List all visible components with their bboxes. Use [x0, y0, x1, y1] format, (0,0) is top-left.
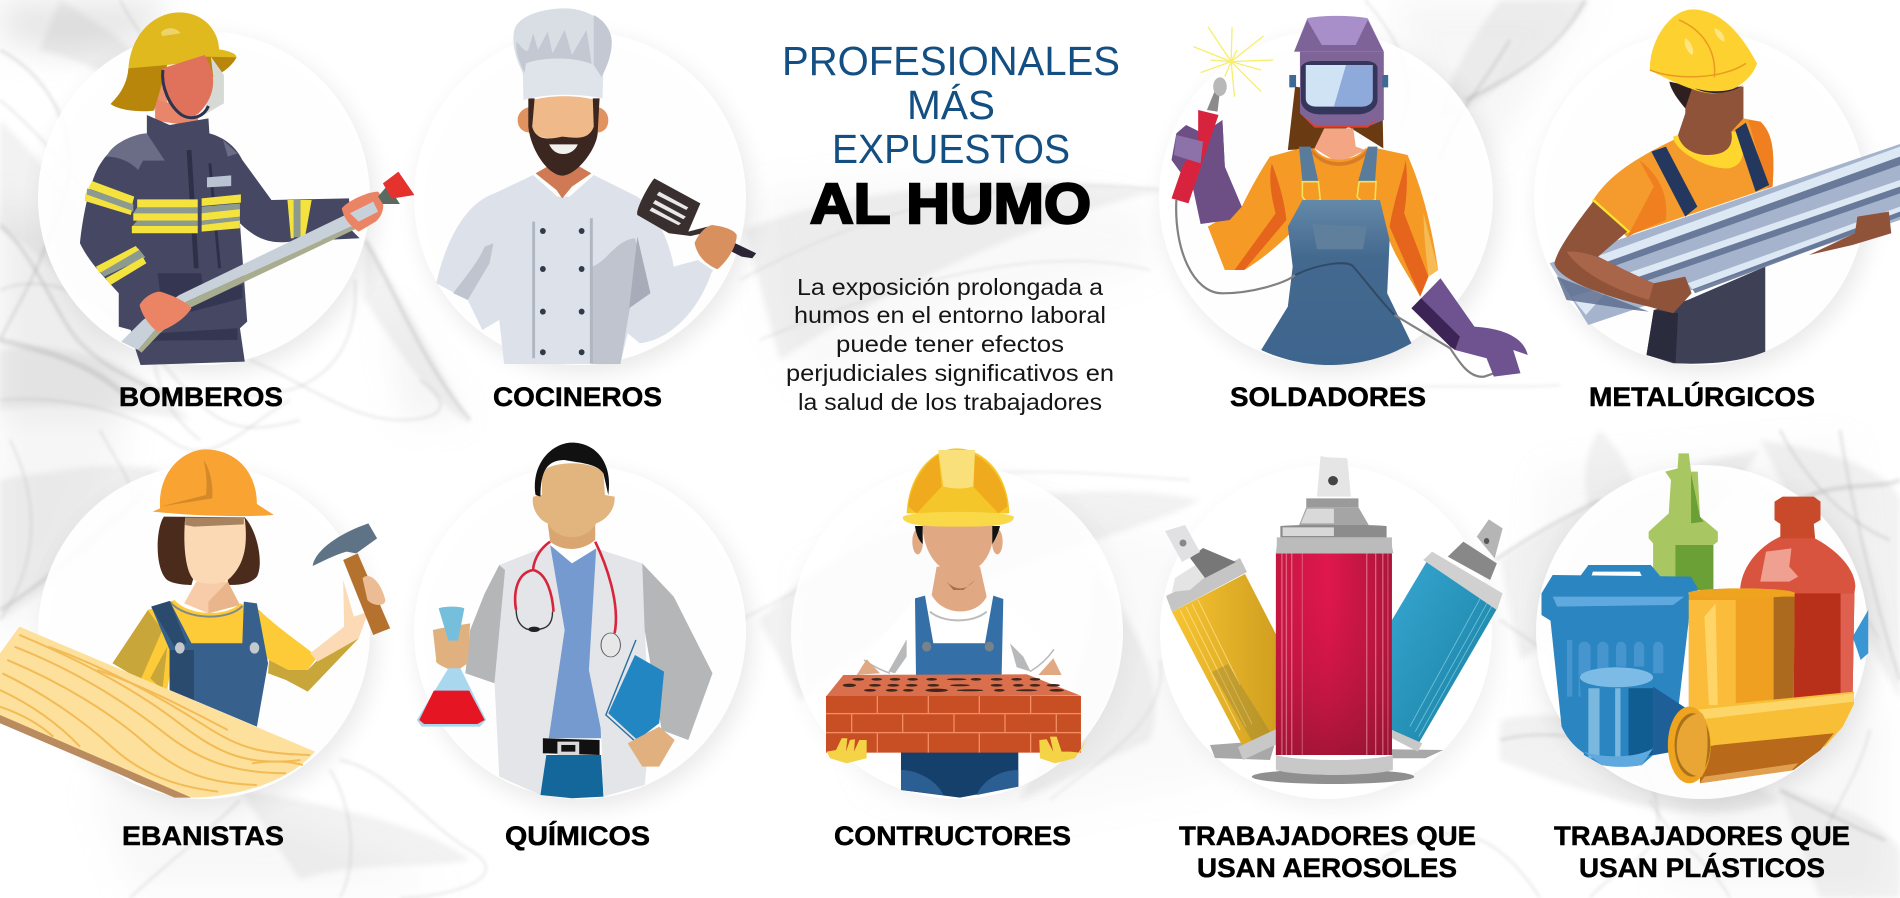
intro text: la salud de los trabajadores	[798, 389, 1102, 415]
title: profesionales más expuestos: MÁS	[907, 82, 995, 128]
title: profesionales más expuestos: PROFESIONALES	[782, 38, 1120, 84]
circle: químicos	[414, 465, 751, 807]
label: ebanistas: EBANISTAS	[122, 821, 284, 851]
panel: bomberos	[38, 12, 414, 412]
illustration: firefighter	[80, 12, 414, 365]
title: profesionales más expuestos: EXPUESTOS	[832, 126, 1070, 172]
shadow: aerosol ground	[1210, 740, 1276, 760]
icon: yellow aerosol can	[1165, 525, 1320, 760]
helmet: carpenter	[153, 449, 274, 516]
panel: químicos	[414, 443, 751, 851]
label: plásticos: TRABAJADORES QUE	[1554, 821, 1850, 851]
label: plásticos	[1554, 821, 1850, 883]
illustration: builder	[820, 448, 1087, 798]
label: cocineros: COCINEROS	[493, 382, 662, 412]
circle: contructores	[791, 465, 1126, 805]
label: aerosoles	[1179, 821, 1476, 883]
label: aerosoles: USAN AEROSOLES	[1197, 853, 1457, 883]
panel: metalúrgicos	[1534, 9, 1900, 412]
icons: red and blue aerosol cans	[1252, 456, 1503, 784]
intro text: puede tener efectos	[836, 331, 1064, 357]
label: aerosoles: TRABAJADORES QUE	[1179, 821, 1476, 851]
illustration: chef	[436, 8, 756, 364]
circle: cocineros	[414, 31, 751, 373]
panel: contructores	[791, 448, 1126, 851]
intro text: perjudiciales significativos en	[786, 360, 1114, 386]
circle: bomberos	[38, 31, 375, 373]
circle: aerosoles	[1160, 465, 1497, 807]
panel: aerosoles	[1160, 456, 1503, 883]
intro text: humos en el entorno laboral	[794, 302, 1106, 328]
title: al humo: AL HUMO	[810, 172, 1091, 236]
label: metalúrgicos: METALÚRGICOS	[1589, 381, 1815, 412]
illustration: welder	[1172, 16, 1528, 377]
label: químicos: QUÍMICOS	[505, 820, 650, 851]
title: profesionales más expuestos	[782, 38, 1120, 172]
label: plásticos: USAN PLÁSTICOS	[1579, 852, 1825, 883]
intro text	[786, 274, 1114, 415]
illustration: plastics	[1541, 453, 1868, 783]
panel: cocineros	[414, 8, 756, 412]
circle: metalúrgicos	[1534, 31, 1871, 373]
intro text: La exposición prolongada a	[797, 274, 1103, 300]
illustration: metalworker	[1550, 9, 1900, 364]
label: contructores: CONTRUCTORES	[834, 821, 1071, 851]
panel: ebanistas	[0, 465, 390, 851]
panel: soldadores	[1159, 16, 1528, 412]
label: bomberos: BOMBEROS	[119, 382, 283, 412]
panel: plásticos	[1536, 453, 1873, 883]
illustration: carpenter	[0, 517, 390, 798]
circle: ebanistas	[38, 465, 375, 807]
illustration: chemist	[417, 443, 713, 798]
circle: soldadores	[1159, 31, 1498, 373]
label: soldadores: SOLDADORES	[1230, 382, 1426, 412]
title block	[782, 38, 1120, 415]
circle: plásticos	[1536, 465, 1873, 807]
